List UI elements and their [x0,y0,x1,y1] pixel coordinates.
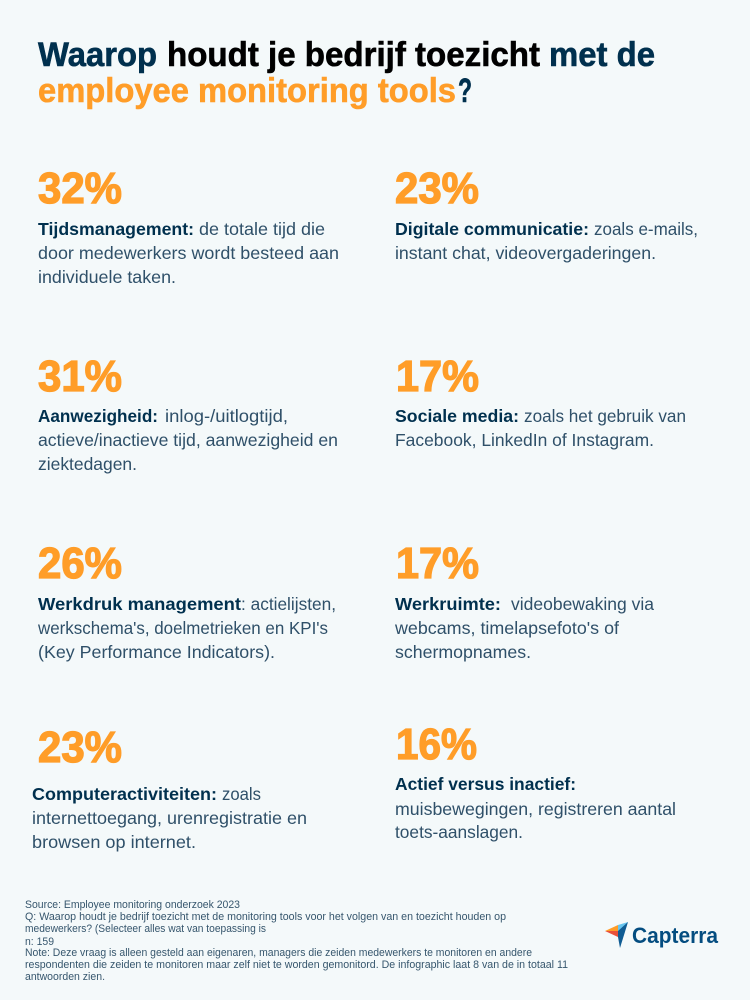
stat: 23% computeractiviteiten: internettoegang, urenregistratie en [32,808,307,828]
source note: Note: Deze vraag is alleen gesteld aan eigenaren, managers die zeiden medewerkers te monitoren en andere [25,947,532,959]
title: ? [458,72,472,110]
stat: 17% sociale media: Sociale media: [395,406,519,426]
title: employee monitoring tools [38,72,456,110]
stat: 23% digitale communicatie: zoals e-mails, [594,219,698,239]
stat: 17% werkruimte: 17% [396,539,479,588]
stat: 31% aanwezigheid: Aanwezigheid: [38,406,158,426]
stat: 17% werkruimte: webcams, timelapsefoto's of [394,618,619,638]
source note [25,899,568,983]
stat: 17% werkruimte: schermopnames. [395,642,531,662]
stat: 32% tijdsmanagement [38,164,339,287]
stat: 17% sociale media: 17% [396,352,479,401]
title: houdt je bedrijf toezicht [167,36,540,74]
stat: 17% sociale media: Facebook, LinkedIn of Instagram. [395,430,654,450]
stat: 23% computeractiviteiten: 23% [38,723,122,772]
stat: 23% computeractiviteiten: browsen op internet. [32,832,196,852]
title [38,36,655,110]
stat: 26% werkdruk management: werkschema's, doelmetrieken en KPI's [37,618,328,638]
stat: 16% actief versus inactief: 16% [396,720,477,769]
icon: Capterra arrow [605,922,628,948]
stat: 32% tijdsmanagement: individuele taken. [38,267,176,287]
stat: 32% tijdsmanagement: Tijdsmanagement: [38,219,194,239]
stat: 16% actief versus inactief: muisbewegingen, registreren aantal [395,799,676,819]
stat: 31% aanwezigheid: actieve/inactieve tijd, aanwezigheid en [38,430,338,450]
stat: 16% actief versus inactief: toets-aanslagen. [395,822,523,842]
stat: 23% digitale communicatie: Digitale communicatie: [395,219,589,239]
stat: 26% werkdruk management: : actielijsten, [241,594,336,614]
source note: medewerkers? (Selecteer alles wat van toepassing is [25,923,267,935]
stat: 26% werkdruk management: 26% [38,539,122,588]
logo: Capterra: Capterra [632,923,719,948]
stat: 23% digitale communicatie: 23% [395,164,479,213]
stat: 23% computeractiviteiten [32,723,307,852]
stat: 31% aanwezigheid: 31% [38,352,122,401]
stat: 17% werkruimte [394,539,654,662]
source note: respondenten die zeiden te monitoren maar zelf niet te worden gemonitord. De infographic laat 8 van de in totaal 11 [25,959,568,971]
source note: n: 159 [25,936,54,948]
stat: 32% tijdsmanagement: door medewerkers wordt besteed aan [38,243,339,263]
stat: 23% computeractiviteiten: Computeractiviteiten: [32,784,217,804]
source note: Source: Employee monitoring onderzoek 2023 [25,899,240,911]
stat: 17% werkruimte: Werkruimte: [395,594,501,614]
stat: 31% aanwezigheid: ziektedagen. [38,454,137,474]
title: Waarop [38,36,157,74]
stat: 26% werkdruk management [37,539,336,662]
stat: 17% sociale media [395,352,686,450]
title: met de [549,36,655,74]
stat: 31% aanwezigheid [38,352,338,474]
stat: 26% werkdruk management: Werkdruk management [38,594,241,614]
stat: 23% digitale communicatie: instant chat, videovergaderingen. [395,243,656,263]
stat: 32% tijdsmanagement: 32% [38,164,122,213]
stat: 31% aanwezigheid: inlog-/uitlogtijd, [165,406,288,426]
stat: 26% werkdruk management: (Key Performance Indicators). [38,642,275,662]
stat: 16% actief versus inactief: Actief versus inactief: [395,774,576,794]
source note: Q: Waarop houdt je bedrijf toezicht met de monitoring tools voor het volgen van en toezicht houden op [25,911,506,923]
stat: 16% actief versus inactief [395,720,676,842]
stat: 17% werkruimte: videobewaking via [511,594,654,614]
stat: 23% computeractiviteiten: zoals [222,784,261,804]
stat: 23% digitale communicatie [395,164,698,263]
stat: 17% sociale media: zoals het gebruik van [524,406,686,426]
source note: antwoorden zien. [25,971,105,983]
stat: 32% tijdsmanagement: de totale tijd die [199,219,325,239]
